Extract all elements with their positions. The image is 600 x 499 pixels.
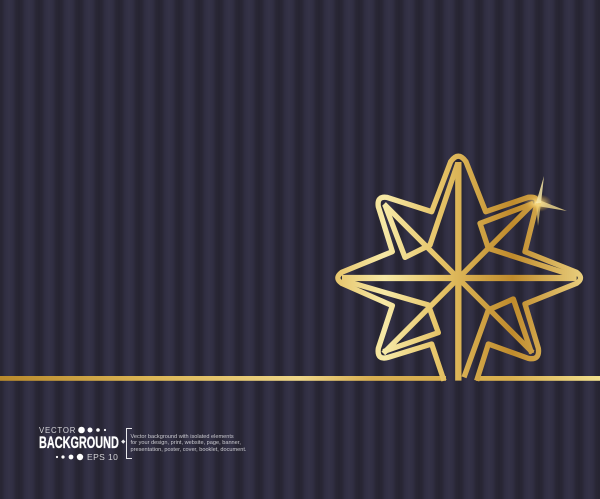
bracket notch — [121, 439, 125, 443]
logo block: vector background eps 10 — [39, 426, 246, 462]
star fold: lower right — [464, 299, 532, 377]
bracket — [126, 428, 132, 459]
star fold: upper right — [480, 203, 577, 277]
gold horizontal line — [0, 376, 600, 381]
description text: Vector background with isolated elements — [130, 434, 234, 440]
label: EPS 10: EPS 10 — [87, 452, 118, 462]
star inner diagonals — [383, 203, 533, 353]
star icon — [338, 156, 580, 381]
star outer outline — [338, 156, 580, 381]
description text: presentation, poster, cover, booklet, document. — [130, 447, 246, 453]
dots bottom row — [56, 454, 84, 460]
description text — [130, 434, 246, 453]
label: VECTOR: VECTOR — [39, 426, 76, 434]
heading: BACKGROUND: BACKGROUND — [39, 434, 119, 452]
star fold: lower left — [342, 280, 438, 352]
star fold: upper left — [385, 163, 458, 257]
dots top row — [78, 426, 106, 434]
star inner cross — [342, 162, 577, 381]
sparkle on star tip — [524, 176, 567, 226]
description text: for your design, print, website, page, banner, — [130, 440, 241, 446]
